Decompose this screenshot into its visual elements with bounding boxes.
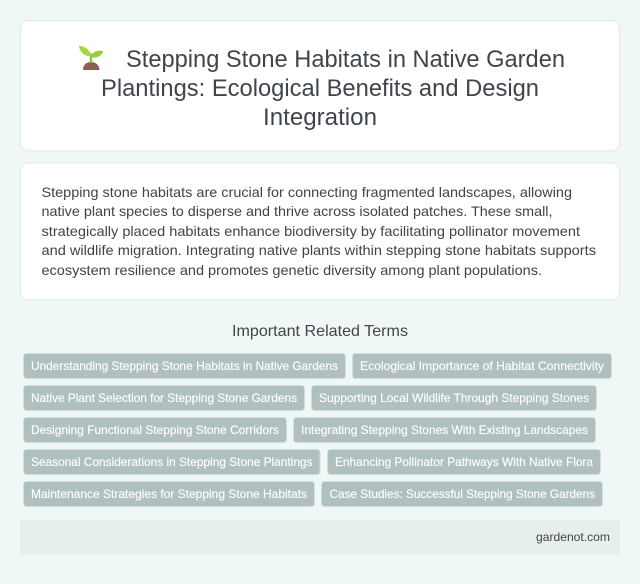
tag: Designing Functional Stepping Stone Corridors [31, 423, 279, 437]
tag: Native Plant Selection for Stepping Stone Gardens [31, 391, 297, 405]
tag [328, 450, 600, 474]
tag: Understanding Stepping Stone Habitats in Native Gardens [31, 359, 338, 373]
tag: Maintenance Strategies for Stepping Stone Habitats [31, 487, 307, 501]
tag [312, 386, 596, 410]
tag [24, 386, 304, 410]
text block: description: ecosystem resilience and promotes genetic diversity among plant populations. [42, 262, 542, 278]
tag: Enhancing Pollinator Pathways With Native Flora [335, 455, 593, 469]
footer [20, 520, 620, 554]
tag [294, 418, 596, 442]
tag [24, 418, 286, 442]
footer source: gardenot.com [536, 530, 610, 544]
icon: sprout [79, 46, 103, 70]
heading: related terms: Important Related Terms [232, 323, 408, 340]
tag: Supporting Local Wildlife Through Stepping Stones [319, 391, 589, 405]
title: Plantings: Ecological Benefits and Design [101, 75, 539, 102]
text block: description: Stepping stone habitats are crucial for connecting fragmented landscapes, allowing [42, 184, 572, 200]
title [101, 46, 565, 131]
title: Integration [263, 104, 377, 131]
text block: description [42, 184, 596, 278]
text block: description: and wildlife migration. Integrating native plants within stepping stone habitats supports [42, 242, 596, 258]
title: Stepping Stone Habitats in Native Garden [126, 46, 565, 73]
tag [24, 482, 314, 506]
panel: title card [20, 20, 620, 151]
tag: Seasonal Considerations in Stepping Stone Plantings [31, 455, 312, 469]
tag: Case Studies: Successful Stepping Stone Gardens [330, 487, 595, 501]
tag: Integrating Stepping Stones With Existing Landscapes [301, 423, 588, 437]
tag: Ecological Importance of Habitat Connectivity [360, 359, 604, 373]
panel: description [20, 163, 620, 300]
tag [24, 450, 320, 474]
tag [322, 482, 602, 506]
tag list [24, 354, 612, 506]
tag [24, 354, 346, 378]
tag [352, 354, 612, 378]
text block: description: strategically placed habitats enhance biodiversity by facilitating pollinator movement [42, 223, 580, 239]
text block: description: native plant species to disperse and thrive across isolated patches. These small, [42, 203, 552, 219]
